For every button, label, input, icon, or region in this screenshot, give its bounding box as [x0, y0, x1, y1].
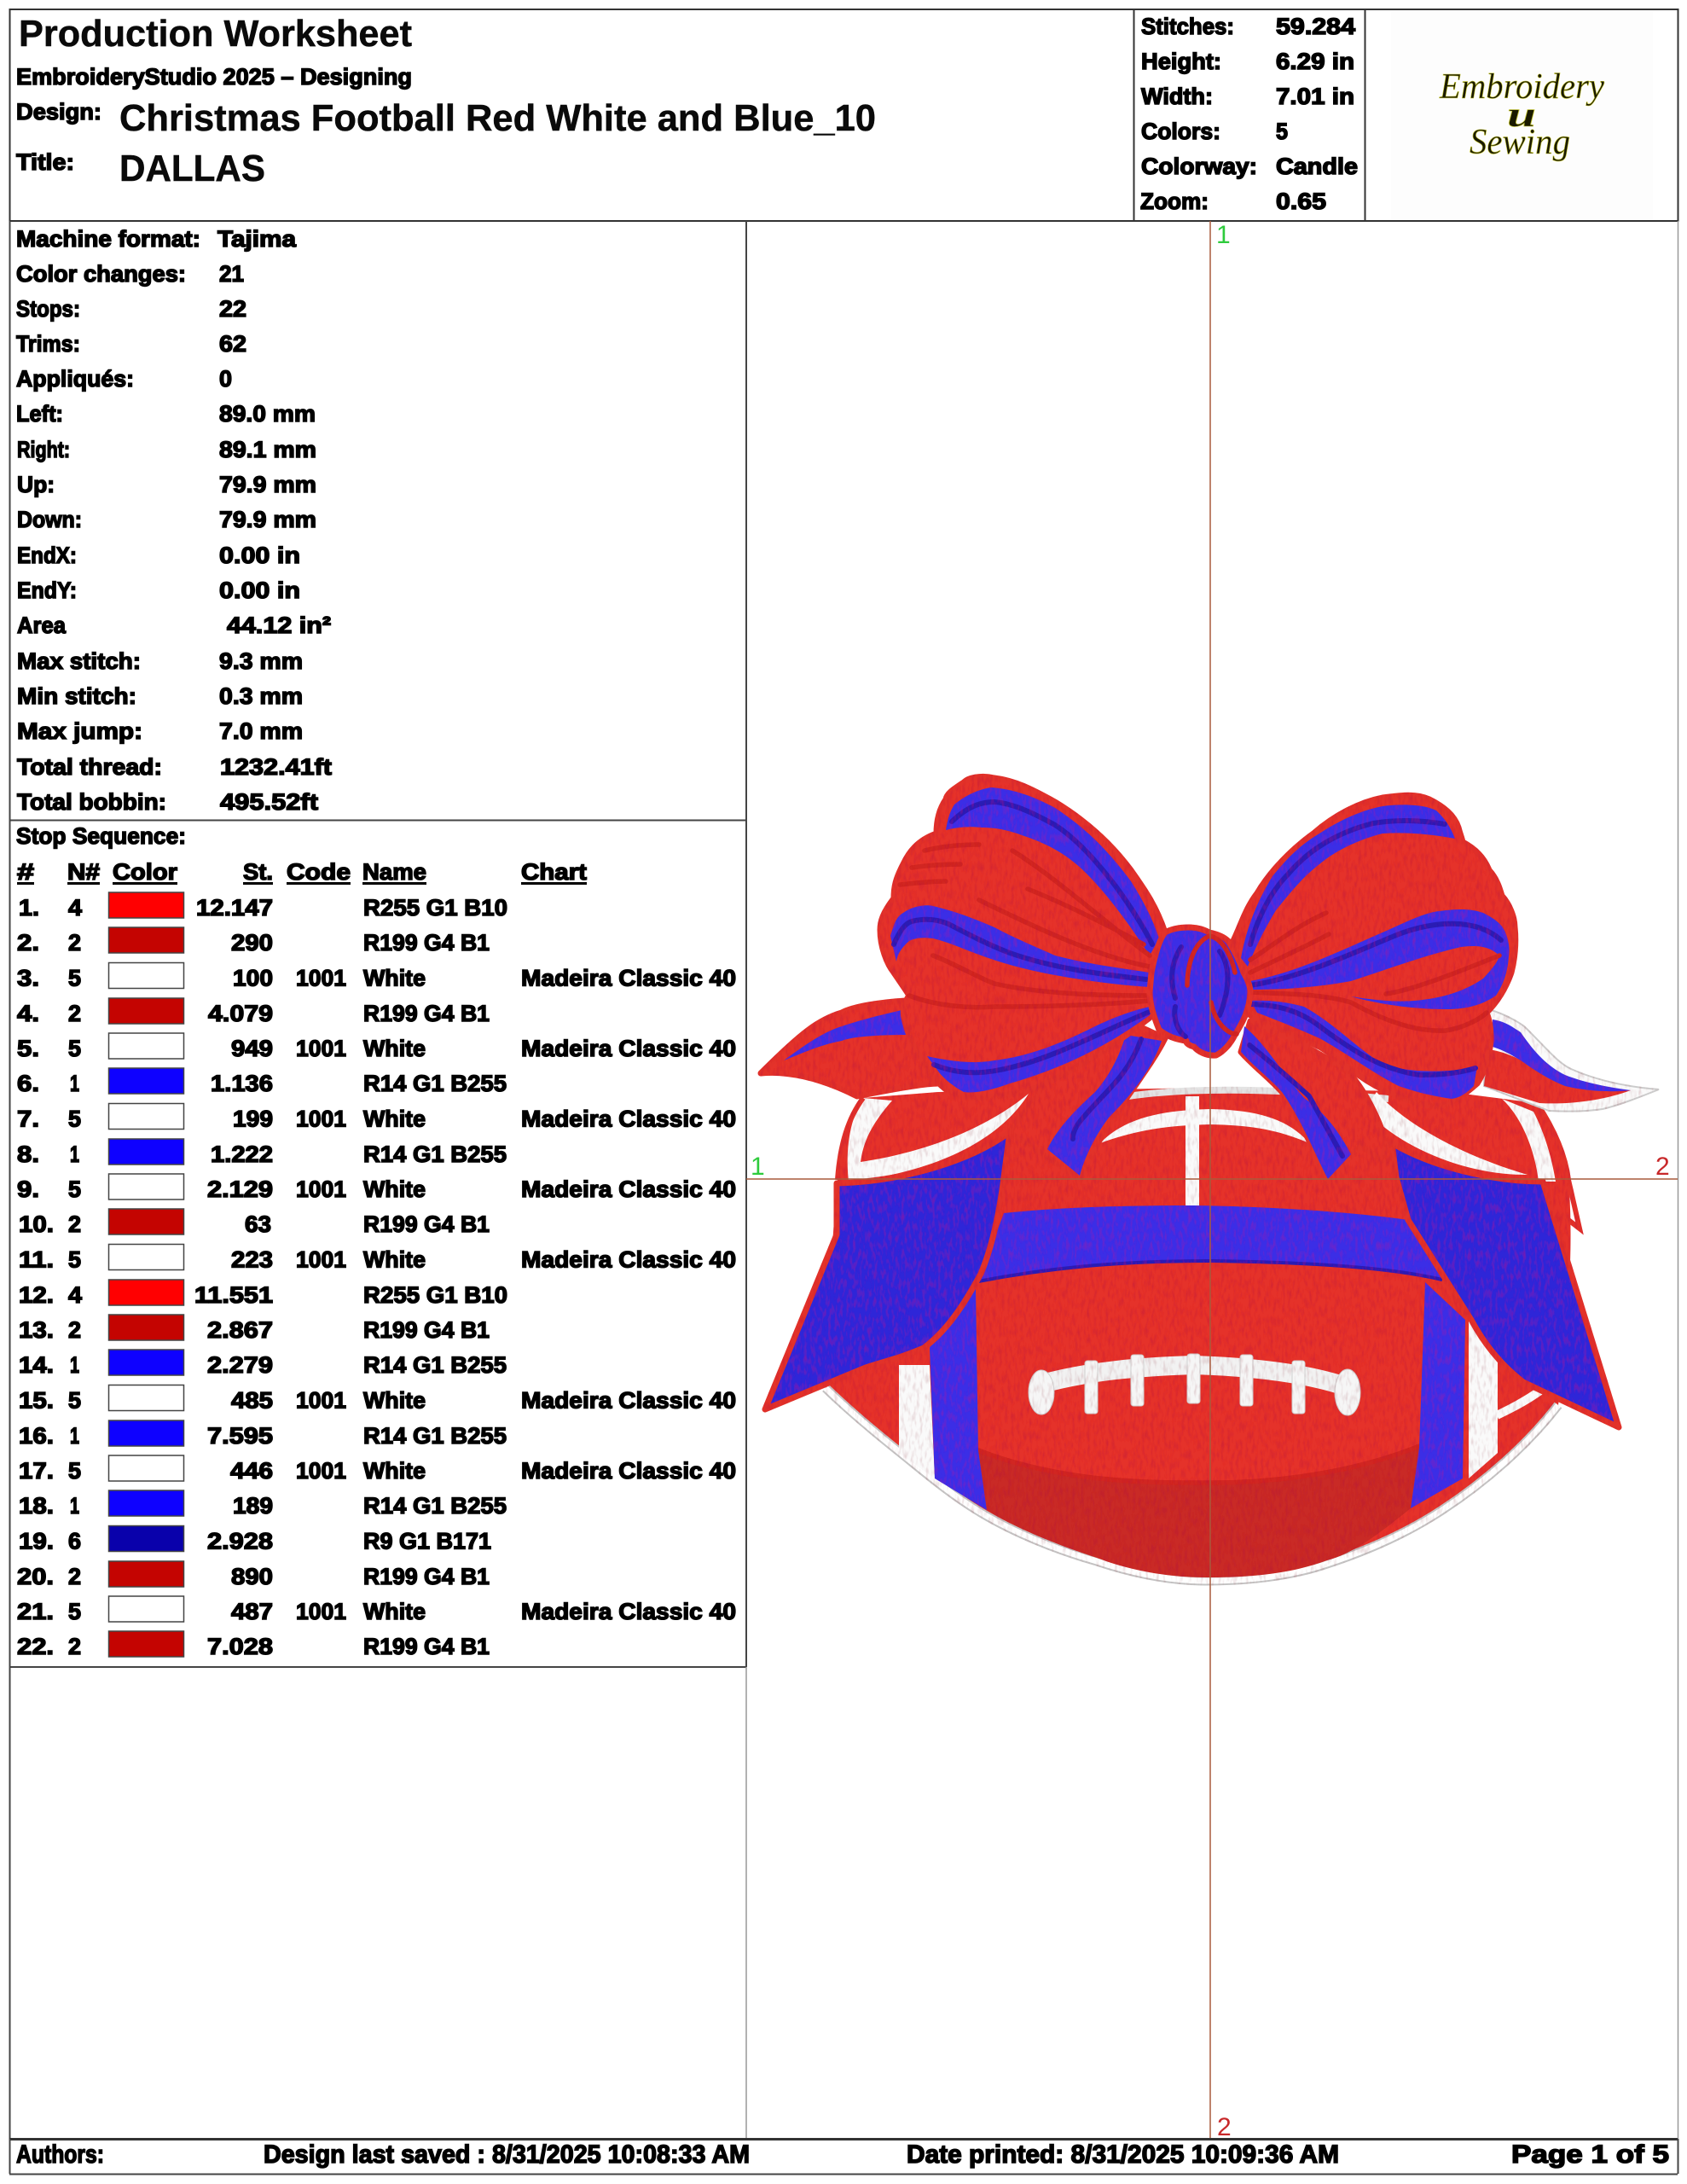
row 21: 1001	[296, 1599, 346, 1624]
embroidery artwork: football with bow	[761, 776, 1659, 1581]
row 6	[17, 1068, 507, 1096]
middle blue band	[890, 905, 1150, 987]
left tail	[765, 1132, 1010, 1409]
row 7: 199	[233, 1106, 273, 1131]
row 22: 2	[68, 1634, 81, 1659]
body side outlines	[838, 1098, 1580, 1228]
knot	[1150, 927, 1250, 1055]
panel: header	[10, 9, 1678, 221]
row 14: 1	[70, 1352, 79, 1378]
panel: machine statistics: Machine format:	[16, 226, 200, 252]
panel: machine statistics: Down:	[17, 507, 82, 532]
row 21: White	[363, 1599, 426, 1624]
row 17	[19, 1455, 736, 1484]
row 4: R199 G4 B1	[363, 1001, 490, 1026]
row 11: White	[363, 1247, 426, 1273]
top outline arc	[1117, 1090, 1388, 1099]
design label: Design:	[16, 99, 101, 125]
row 12: R255 G1 B10	[363, 1282, 507, 1308]
row 20: 2	[68, 1564, 81, 1589]
panel: machine statistics: Color changes:	[16, 261, 186, 287]
panel: machine statistics: Area	[17, 613, 67, 638]
row 16: 1	[70, 1423, 79, 1449]
laces	[1029, 1354, 1360, 1415]
panel: design preview frame	[746, 221, 1678, 2139]
panel: design stats: Width:	[1141, 84, 1213, 109]
row 2: 2	[68, 930, 81, 956]
row 15: 485	[231, 1387, 273, 1413]
panel: machine statistics: Total thread:	[17, 754, 162, 780]
row 18: R14 G1 B255	[363, 1493, 507, 1519]
table header: #	[17, 859, 34, 885]
row 13: R199 G4 B1	[363, 1317, 490, 1343]
row 20	[17, 1561, 490, 1589]
software subtitle: EmbroideryStudio 2025 – Designing	[16, 64, 412, 90]
panel: machine statistics: Max jump:	[17, 718, 142, 744]
row 16: 16.	[19, 1423, 54, 1449]
row 18: 1	[70, 1493, 79, 1519]
crosshair label: right 2: 2	[1655, 1153, 1670, 1181]
logo: Embroidery n Sewing	[1391, 11, 1653, 220]
logo: Embroidery n Sewing: u	[1507, 96, 1536, 135]
panel: machine statistics: 44.12 in²	[227, 613, 331, 638]
design title: DALLAS	[119, 148, 265, 189]
title label: Title:	[16, 149, 74, 175]
left ribbon strap	[1010, 1019, 1165, 1180]
row 13: 2	[68, 1317, 81, 1343]
row 6: R14 G1 B255	[363, 1071, 507, 1096]
panel: machine statistics: 9.3 mm	[219, 648, 303, 674]
panel: machine statistics: Right:	[17, 437, 70, 462]
row 17: 5	[68, 1458, 81, 1484]
table frame	[9, 221, 746, 2139]
row 3: 1001	[296, 966, 346, 991]
row 3	[17, 962, 736, 991]
table header: Chart	[521, 859, 587, 885]
row 14: 2.279	[207, 1352, 273, 1378]
row 22: 7.028	[207, 1634, 273, 1659]
row 11: 223	[231, 1247, 273, 1273]
row 14: R14 G1 B255	[363, 1352, 507, 1378]
row 4: 4.	[17, 1001, 39, 1026]
row 16	[19, 1420, 507, 1449]
row 21: 487	[231, 1599, 273, 1624]
row 1: 1.	[19, 895, 39, 921]
row 7: White	[363, 1106, 426, 1131]
row 1	[19, 892, 507, 921]
panel: machine statistics: EndY:	[17, 578, 77, 603]
row 3: White	[363, 966, 426, 991]
row 5: 5	[68, 1036, 81, 1061]
row 15	[19, 1385, 736, 1413]
panel: stop sequence table	[9, 221, 746, 2139]
row 18: 189	[233, 1493, 273, 1519]
fold lines	[1250, 913, 1499, 1031]
row 6: 6.	[17, 1071, 39, 1096]
row 8	[17, 1139, 507, 1167]
row 7: 5	[68, 1106, 81, 1131]
row 8: 1.222	[211, 1141, 273, 1167]
crosshair label: top 1: 1	[1216, 221, 1231, 249]
panel: machine statistics: Left:	[16, 401, 63, 427]
row 20: R199 G4 B1	[363, 1564, 490, 1589]
row 13: 2.867	[207, 1317, 273, 1343]
row 16: R14 G1 B255	[363, 1423, 507, 1449]
row 7: 7.	[17, 1106, 39, 1131]
panel: machine statistics: 21	[219, 261, 244, 287]
row 11: 5	[68, 1247, 81, 1273]
panel: design stats: 0.65	[1276, 189, 1326, 214]
row 15: Madeira Classic 40	[521, 1387, 736, 1413]
row 4	[17, 998, 490, 1026]
panel: machine statistics: EndX:	[17, 543, 77, 568]
panel: design stats: Zoom:	[1140, 189, 1209, 214]
row 19: 2.928	[207, 1529, 273, 1554]
row 12	[19, 1280, 507, 1308]
row 21	[17, 1596, 736, 1624]
row 12: 12.	[19, 1282, 54, 1308]
logo: Embroidery n Sewing: Sewing	[1470, 123, 1570, 162]
left bow loop	[880, 776, 1165, 1098]
panel: machine statistics: Max stitch:	[17, 648, 141, 674]
table header: St.	[243, 859, 273, 885]
row 3: 5	[68, 966, 81, 991]
panel: design stats: 6.29 in	[1276, 49, 1354, 74]
row 17: Madeira Classic 40	[521, 1458, 736, 1484]
row 9: 9.	[17, 1176, 39, 1202]
row 10	[19, 1209, 490, 1237]
row 1: 12.147	[196, 895, 273, 921]
footer: Page 1 of 5	[1511, 2140, 1669, 2169]
logo: Embroidery n Sewing: Embroidery	[1439, 67, 1604, 107]
panel: machine statistics: 495.52ft	[220, 789, 318, 815]
row 10: 2	[68, 1211, 81, 1237]
table header: N#	[67, 859, 100, 885]
blue crossbar and side stripes	[930, 1205, 1465, 1510]
row 5: 949	[231, 1036, 273, 1061]
bottom outline	[826, 1388, 1558, 1581]
row 15: 15.	[19, 1387, 54, 1413]
panel: machine statistics: 62	[219, 331, 246, 357]
footer: Design last saved : 8/31/2025 10:08:33 AM	[264, 2140, 750, 2169]
row 19	[19, 1525, 491, 1554]
row 2: 2.	[17, 930, 39, 956]
panel: machine statistics: 79.9 mm	[219, 472, 316, 497]
row 15: White	[363, 1387, 426, 1413]
row 3: 3.	[17, 966, 39, 991]
crosshair label: left 1: 1	[751, 1153, 765, 1181]
right tail	[1392, 1143, 1619, 1427]
row 5: Madeira Classic 40	[521, 1036, 736, 1061]
row 21: Madeira Classic 40	[521, 1599, 736, 1624]
white stripes	[848, 1092, 1556, 1478]
panel: machine statistics: Stops:	[16, 296, 80, 322]
row 10: 63	[245, 1211, 271, 1237]
panel: machine statistics: 79.9 mm	[219, 507, 316, 532]
panel: machine statistics: Trims:	[16, 331, 80, 357]
row 8: R14 G1 B255	[363, 1141, 507, 1167]
row 17: 1001	[296, 1458, 346, 1484]
footer: Date printed: 8/31/2025 10:09:36 AM	[907, 2140, 1339, 2169]
right bow loop	[1232, 795, 1516, 1107]
panel: machine statistics: 89.0 mm	[219, 401, 316, 427]
row 9: White	[363, 1176, 426, 1202]
row 10: 10.	[19, 1211, 54, 1237]
row 17: 17.	[19, 1458, 54, 1484]
panel: machine statistics: 0.00 in	[219, 578, 300, 603]
crosshair label: bottom 2: 2	[1217, 2113, 1232, 2141]
stop sequence heading: Stop Sequence:	[16, 823, 186, 849]
left wing	[761, 1001, 938, 1096]
panel: design stats: 5	[1276, 119, 1288, 144]
panel: machine statistics: 0	[219, 366, 232, 392]
row 21: 5	[68, 1599, 81, 1624]
row 4: 2	[68, 1001, 81, 1026]
row 22: 22.	[17, 1634, 54, 1659]
seam	[978, 1446, 1419, 1483]
row 2	[17, 927, 490, 956]
row 3: 100	[233, 966, 273, 991]
row 10: R199 G4 B1	[363, 1211, 490, 1237]
row 11: 1001	[296, 1247, 346, 1273]
row 14: 14.	[19, 1352, 54, 1378]
top blue strip	[946, 787, 1159, 956]
panel: design stats: Stitches:	[1141, 14, 1234, 39]
panel: machine statistics: 7.0 mm	[219, 718, 303, 744]
row 17: White	[363, 1458, 426, 1484]
table header: Color	[113, 859, 178, 885]
row 1: 4	[68, 895, 82, 921]
row 14	[19, 1350, 507, 1378]
row 11	[19, 1244, 736, 1273]
panel: machine statistics: Up:	[17, 472, 55, 497]
panel: design stats: Height:	[1141, 49, 1221, 74]
row 7: 1001	[296, 1106, 346, 1131]
row 11: Madeira Classic 40	[521, 1247, 736, 1273]
row 19: 19.	[19, 1529, 54, 1554]
row 17: 446	[230, 1458, 273, 1484]
row 2: 290	[231, 930, 273, 956]
table header	[17, 859, 587, 885]
lower dark panel	[978, 1446, 1419, 1577]
row 19: 6	[68, 1529, 81, 1554]
right ribbon strap	[1241, 1021, 1386, 1183]
row 4: 4.079	[208, 1001, 273, 1026]
row 12: 4	[68, 1282, 82, 1308]
middle blue band	[1250, 909, 1510, 1009]
row 9: 5	[68, 1176, 81, 1202]
row 20: 890	[231, 1564, 273, 1589]
row 8: 8.	[17, 1141, 39, 1167]
row 15: 5	[68, 1387, 81, 1413]
row 9: Madeira Classic 40	[521, 1176, 736, 1202]
row 6: 1	[70, 1071, 79, 1096]
panel: machine statistics: 0.00 in	[219, 543, 300, 568]
row 3: Madeira Classic 40	[521, 966, 736, 991]
row 15: 1001	[296, 1387, 346, 1413]
design name: Christmas Football Red White and Blue_10	[119, 97, 876, 139]
row 12: 11.551	[194, 1282, 273, 1308]
panel: design stats	[1134, 9, 1365, 221]
row 9: 1001	[296, 1176, 346, 1202]
football body	[826, 1088, 1571, 1581]
panel: machine statistics: Total bobbin:	[17, 789, 166, 815]
panel: design stats: 7.01 in	[1276, 84, 1354, 109]
right wing	[1484, 1009, 1659, 1112]
row 7: Madeira Classic 40	[521, 1106, 736, 1131]
crosshair guide lines	[746, 221, 1678, 2139]
row 18	[19, 1490, 507, 1519]
row 22: R199 G4 B1	[363, 1634, 490, 1659]
row 9	[17, 1174, 736, 1202]
row 2: R199 G4 B1	[363, 930, 490, 956]
row 8: 1	[70, 1141, 79, 1167]
panel: machine statistics: 89.1 mm	[219, 437, 316, 462]
row 21: 21.	[17, 1599, 54, 1624]
panel: machine statistics: 1232.41ft	[220, 754, 332, 780]
panel: design stats: Candle	[1276, 154, 1358, 179]
lower blue band	[927, 1007, 1150, 1092]
lower blue band	[1250, 1001, 1477, 1099]
table header: Name	[362, 859, 426, 885]
title: Production Worksheet	[19, 13, 412, 55]
row 5: 5.	[17, 1036, 39, 1061]
panel: machine statistics: 22	[219, 296, 246, 322]
panel: machine statistics: Appliqués:	[16, 366, 134, 392]
top blue strip	[1241, 804, 1455, 967]
row 5: 1001	[296, 1036, 346, 1061]
row 6: 1.136	[211, 1071, 273, 1096]
panel: machine statistics	[16, 226, 332, 815]
row 1: R255 G1 B10	[363, 895, 507, 921]
panel: design stats: 59.284	[1276, 14, 1355, 39]
row 7	[17, 1104, 736, 1131]
row 13	[19, 1315, 490, 1343]
row 11: 11.	[19, 1247, 54, 1273]
fold lines	[900, 845, 1150, 1008]
panel: machine statistics: Min stitch:	[17, 683, 136, 709]
row 16: 7.595	[207, 1423, 273, 1449]
footer: Authors:	[16, 2140, 104, 2169]
row 5: White	[363, 1036, 426, 1061]
row 22	[17, 1631, 490, 1659]
panel: machine statistics: Tajima	[217, 226, 297, 252]
row 5	[17, 1033, 736, 1061]
row 20: 20.	[17, 1564, 54, 1589]
panel: design stats: Colors:	[1141, 119, 1220, 144]
row 13: 13.	[19, 1317, 54, 1343]
table header: Code	[287, 859, 351, 885]
row 9: 2.129	[207, 1176, 273, 1202]
panel: machine statistics: 0.3 mm	[219, 683, 303, 709]
row 19: R9 G1 B171	[363, 1529, 491, 1554]
panel: design stats: Colorway:	[1141, 154, 1257, 179]
footer	[9, 2139, 1678, 2174]
row 18: 18.	[19, 1493, 54, 1519]
